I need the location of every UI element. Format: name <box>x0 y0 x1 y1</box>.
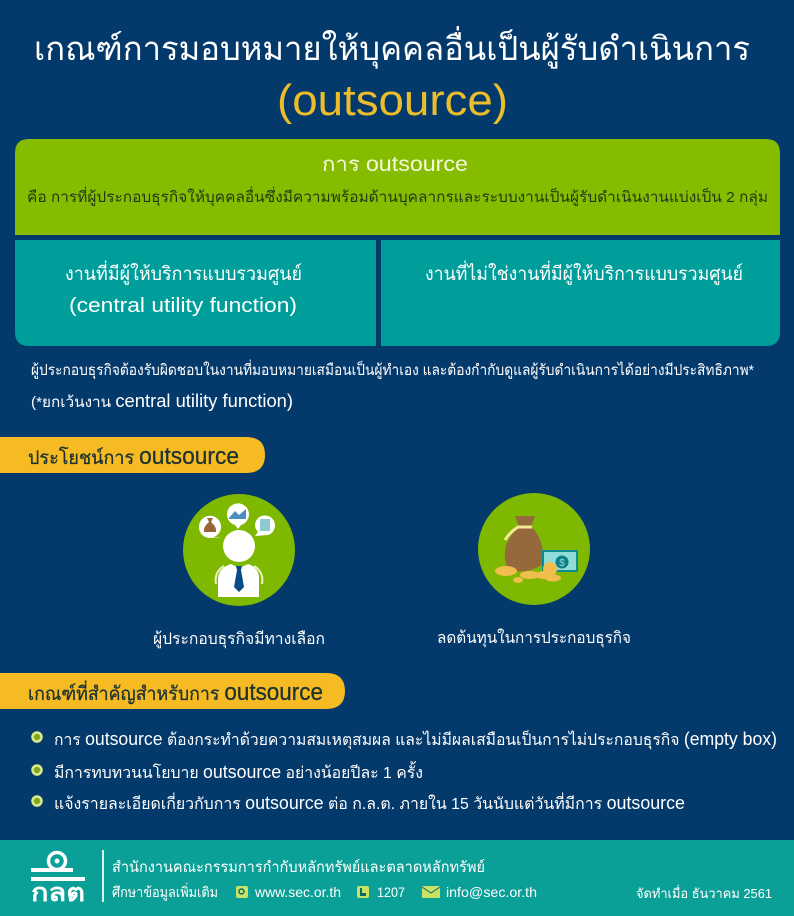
footer date: จัดทำเมื่อ ธันวาคม 2561 <box>636 885 772 901</box>
footer contacts: www.sec.or.th <box>254 884 341 900</box>
list: criteria <box>32 729 777 813</box>
bullet item 2: มีการทบทวนนโยบาย outsource อย่างน้อยปีละ 1 ครั้ง <box>54 761 423 782</box>
heading: benefits: ประโยชน์การ outsource <box>28 443 239 470</box>
icon: business person with options <box>183 494 295 606</box>
panel: definition of outsource: คือ การที่ผู้ประกอบธุรกิจให้บุคคลอื่นซึ่งมีความพร้อมด้านบุคลากรและระบบงานเป็นผู้รับดำเนินงานแบ่งเป็น 2 กลุ่ม <box>27 186 768 207</box>
label: reduces business cost: ลดต้นทุนในการประกอบธุรกิจ <box>437 628 631 648</box>
panel: definition of outsource <box>15 139 780 235</box>
label: business operator has options: ผู้ประกอบธุรกิจมีทางเลือก <box>153 630 325 649</box>
title: เกณฑ์การมอบหมายให้บุคคลอื่นเป็นผู้รับดำเนินการ <box>34 26 750 69</box>
panel: non central utility function <box>381 240 780 346</box>
footer contacts: info@sec.or.th <box>446 884 537 900</box>
panel: central utility function: (central utility function) <box>69 295 297 317</box>
icon: money bag and cash <box>478 493 590 605</box>
icon: website <box>236 886 248 898</box>
icon: money bag and cash: $ <box>559 558 565 569</box>
title: (outsource) <box>277 76 508 125</box>
text block: responsibility note: (*ยกเว้นงาน central utility function) <box>31 391 293 411</box>
heading: key criteria: เกณฑ์ที่สำคัญสำหรับการ outsource <box>28 679 323 706</box>
panel: definition of outsource: การ outsource <box>322 153 468 176</box>
icon: SEC logo: กลต <box>31 879 85 907</box>
footer contacts <box>112 883 537 901</box>
icon: email <box>422 886 440 898</box>
footer contacts: 1207 <box>377 884 405 900</box>
footer contacts: ศึกษาข้อมูลเพิ่มเติม <box>112 883 218 901</box>
bullet item 3: แจ้งรายละเอียดเกี่ยวกับการ outsource ต่อ ก.ล.ต. ภายใน 15 วันนับแต่วันที่มีการ outsource <box>54 792 685 813</box>
heading: key criteria <box>0 673 345 709</box>
footer band <box>0 840 794 916</box>
panel: central utility function <box>15 240 376 346</box>
panel: non central utility function: งานที่ไม่ใช่งานที่มีผู้ให้บริการแบบรวมศูนย์ <box>425 260 743 285</box>
heading: benefits <box>0 437 265 473</box>
icon: SEC logo <box>31 852 85 907</box>
icon: phone <box>357 886 369 898</box>
bullet item 1: การ outsource ต้องกระทำด้วยความสมเหตุสมผล และไม่มีผลเสมือนเป็นการไม่ประกอบธุรกิจ (empty box) <box>54 729 777 750</box>
footer office name: สำนักงานคณะกรรมการกำกับหลักทรัพย์และตลาดหลักทรัพย์ <box>112 859 485 876</box>
title <box>34 26 750 125</box>
text block: responsibility note <box>31 359 754 411</box>
panel: central utility function: งานที่มีผู้ให้บริการแบบรวมศูนย์ <box>65 260 302 285</box>
